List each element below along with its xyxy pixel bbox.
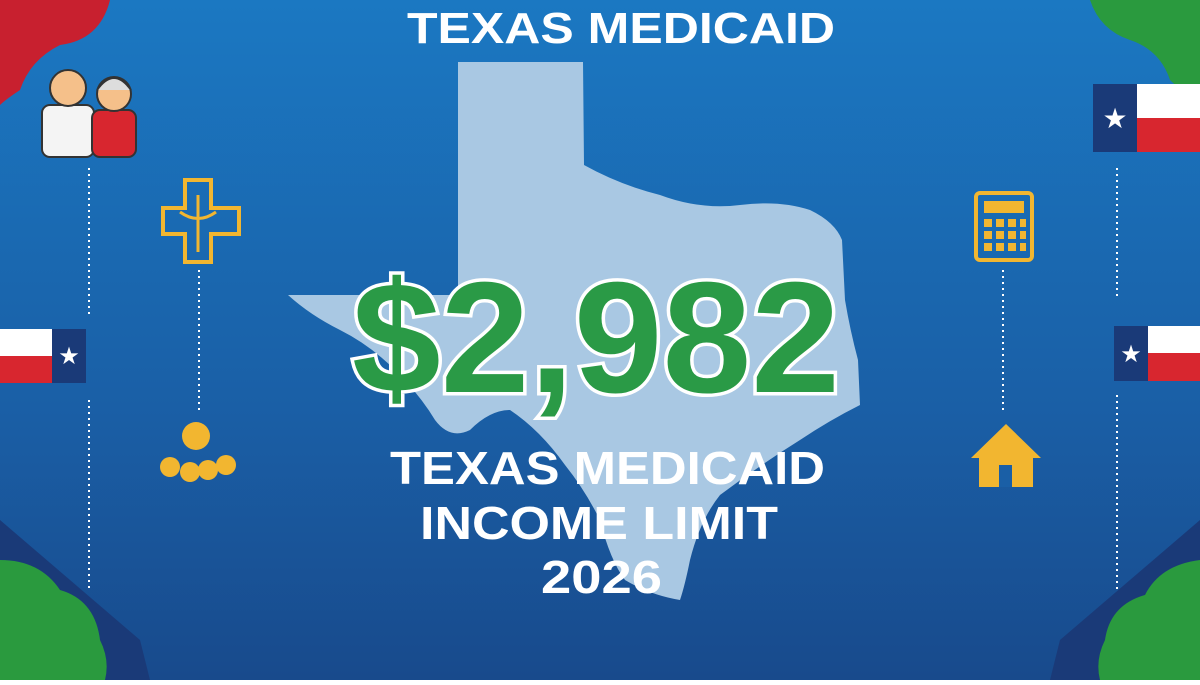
icon: texas flag top right xyxy=(1093,84,1200,152)
big amount: $2,982 xyxy=(352,250,840,426)
decorative corner: bottom-right xyxy=(1050,520,1200,680)
icon: texas flag right: ★ xyxy=(1120,341,1142,368)
icon: texas flag right xyxy=(1114,326,1200,381)
subtitle xyxy=(390,442,825,603)
icon: calculator xyxy=(976,193,1032,260)
subtitle: 2026 xyxy=(541,551,662,603)
left dotted lines xyxy=(89,168,1117,590)
icon: house xyxy=(971,424,1041,487)
icon: texas flag left: ★ xyxy=(58,343,80,370)
subtitle: TEXAS MEDICAID xyxy=(390,442,825,494)
title: TEXAS MEDICAID xyxy=(407,4,835,53)
texas map xyxy=(288,62,860,600)
decorative corner: top-left red xyxy=(0,0,110,105)
decorative corner: bottom-left xyxy=(0,520,150,680)
decorative corner: top-right green xyxy=(1090,0,1200,100)
icon: coins xyxy=(160,422,236,482)
icon: elderly couple xyxy=(42,70,136,157)
icon: texas flag top right: ★ xyxy=(1102,103,1128,134)
subtitle: INCOME LIMIT xyxy=(420,497,778,549)
icon: texas flag left xyxy=(0,329,86,383)
icon: medical cross xyxy=(163,180,239,262)
